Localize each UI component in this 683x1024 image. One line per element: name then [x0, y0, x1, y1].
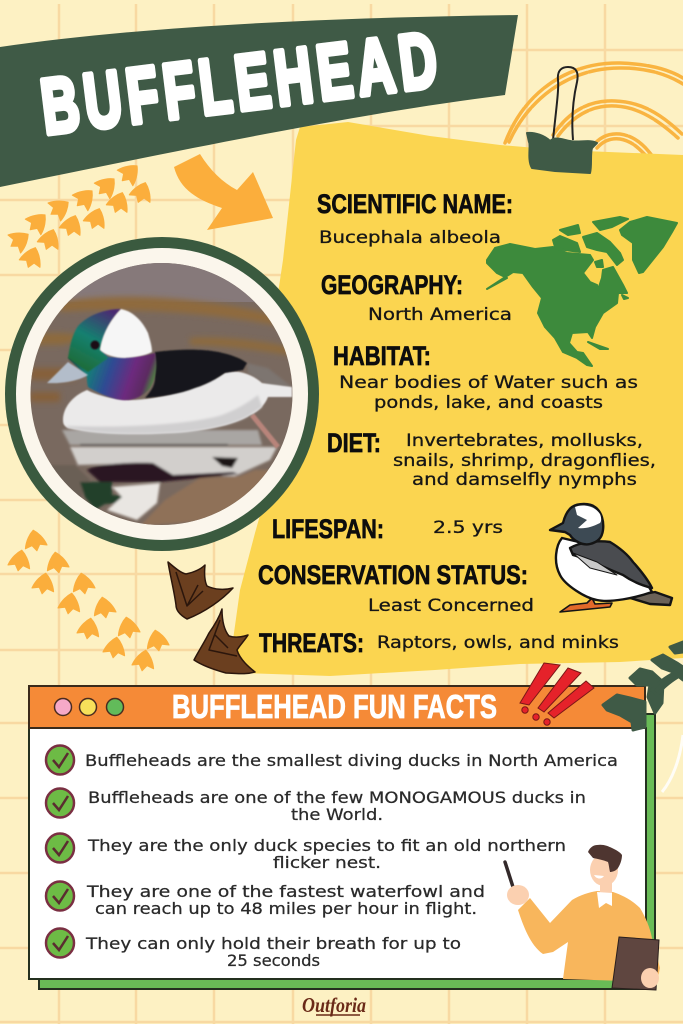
fact 1: Buffleheads are the smallest diving ducks in North America — [85, 751, 618, 770]
diet: and damselfly nymphs — [412, 470, 637, 490]
duck feet — [560, 598, 612, 612]
habitat — [333, 341, 638, 413]
duck body — [63, 371, 292, 434]
threats — [259, 628, 619, 658]
green backing panel — [39, 714, 655, 989]
fact 5 — [46, 928, 461, 970]
fun facts panel — [29, 642, 683, 989]
lifespan — [272, 514, 503, 544]
water reflection — [30, 430, 277, 526]
smile — [594, 875, 604, 878]
plant leaves — [603, 642, 683, 730]
conservation status: CONSERVATION STATUS: — [258, 560, 528, 590]
habitat: ponds, lake, and coasts — [374, 393, 603, 413]
title: BUFFLEHEAD — [37, 16, 442, 152]
fact 4: They are one of the fastest waterfowl and — [86, 882, 485, 901]
hand on clipboard — [641, 968, 659, 988]
fact 3: They are the only duck species to fit an old northern — [87, 836, 566, 855]
duck body — [556, 538, 652, 601]
duck head — [550, 504, 603, 544]
fact 2: the World. — [291, 805, 383, 824]
fact 4: can reach up to 48 miles per hour in flight. — [95, 899, 477, 918]
teacher illustration — [505, 845, 660, 990]
scientific name: Bucephala albeola — [319, 228, 501, 248]
fact 5: They can only hold their breath for up to — [85, 934, 461, 953]
habitat: Near bodies of Water such as — [339, 373, 638, 393]
footprints upper trail — [5, 158, 156, 271]
lifespan: LIFESPAN: — [272, 514, 384, 544]
duck head — [68, 309, 121, 372]
duck bill — [47, 362, 88, 383]
duck leg — [252, 415, 278, 447]
hair — [588, 845, 622, 872]
small duck illustration — [550, 504, 672, 612]
exclamation marks — [520, 663, 594, 725]
pointer — [505, 862, 513, 887]
decorative orange scribble arcs — [505, 63, 683, 158]
hand — [507, 885, 529, 905]
white panel — [29, 728, 646, 979]
fact 3: flicker nest. — [273, 853, 381, 872]
brown webbed foot lower — [194, 609, 255, 674]
decorative white stroke at right — [662, 735, 683, 792]
map: North America — [487, 217, 677, 366]
fact 3 — [46, 834, 566, 872]
text: details — [258, 189, 656, 658]
fact 2 — [46, 788, 586, 824]
duck neck — [68, 350, 156, 400]
threats: Raptors, owls, and minks — [377, 633, 619, 653]
orange header — [29, 686, 645, 728]
conservation status: Least Concerned — [368, 596, 534, 616]
fact 1 — [46, 746, 618, 774]
fact 5: 25 seconds — [227, 951, 320, 970]
yellow paper panel — [233, 122, 683, 676]
duck white patch — [100, 309, 152, 358]
collar — [597, 892, 612, 908]
duck wing — [570, 541, 652, 588]
diet: snails, shrimp, dragonflies, — [393, 451, 656, 471]
neck — [600, 880, 612, 895]
duck tail — [627, 592, 672, 605]
sweater — [518, 891, 660, 982]
lifespan: 2.5 yrs — [433, 518, 503, 538]
window dots — [54, 698, 124, 716]
duck tail — [248, 364, 290, 386]
footprints lower trail — [7, 528, 170, 673]
threats: THREATS: — [259, 628, 364, 658]
binder clip — [527, 67, 597, 173]
arrow: orange curved — [174, 154, 273, 230]
brown webbed foot upper — [168, 562, 233, 619]
geography — [321, 270, 512, 325]
checklist — [46, 746, 618, 970]
photo circle: bufflehead duck — [5, 237, 319, 551]
clipboard — [612, 937, 659, 990]
logo: Outforia: Outforia — [302, 993, 366, 1017]
fact 2: Buffleheads are one of the few MONOGAMOUS ducks in — [88, 788, 586, 807]
diet: DIET: — [327, 428, 381, 458]
face — [590, 854, 618, 886]
scientific name: SCIENTIFIC NAME: — [317, 189, 513, 219]
conservation status — [258, 560, 534, 616]
geography: North America — [368, 305, 512, 325]
scientific name — [317, 189, 513, 248]
diet: Invertebrates, mollusks, — [406, 431, 643, 451]
heading: BUFFLEHEAD FUN FACTS — [172, 688, 497, 725]
title banner — [0, 15, 518, 187]
fact 4 — [46, 882, 485, 918]
geography: GEOGRAPHY: — [321, 270, 463, 300]
diet — [327, 428, 656, 490]
habitat: HABITAT: — [333, 341, 431, 371]
duck back — [145, 350, 247, 398]
